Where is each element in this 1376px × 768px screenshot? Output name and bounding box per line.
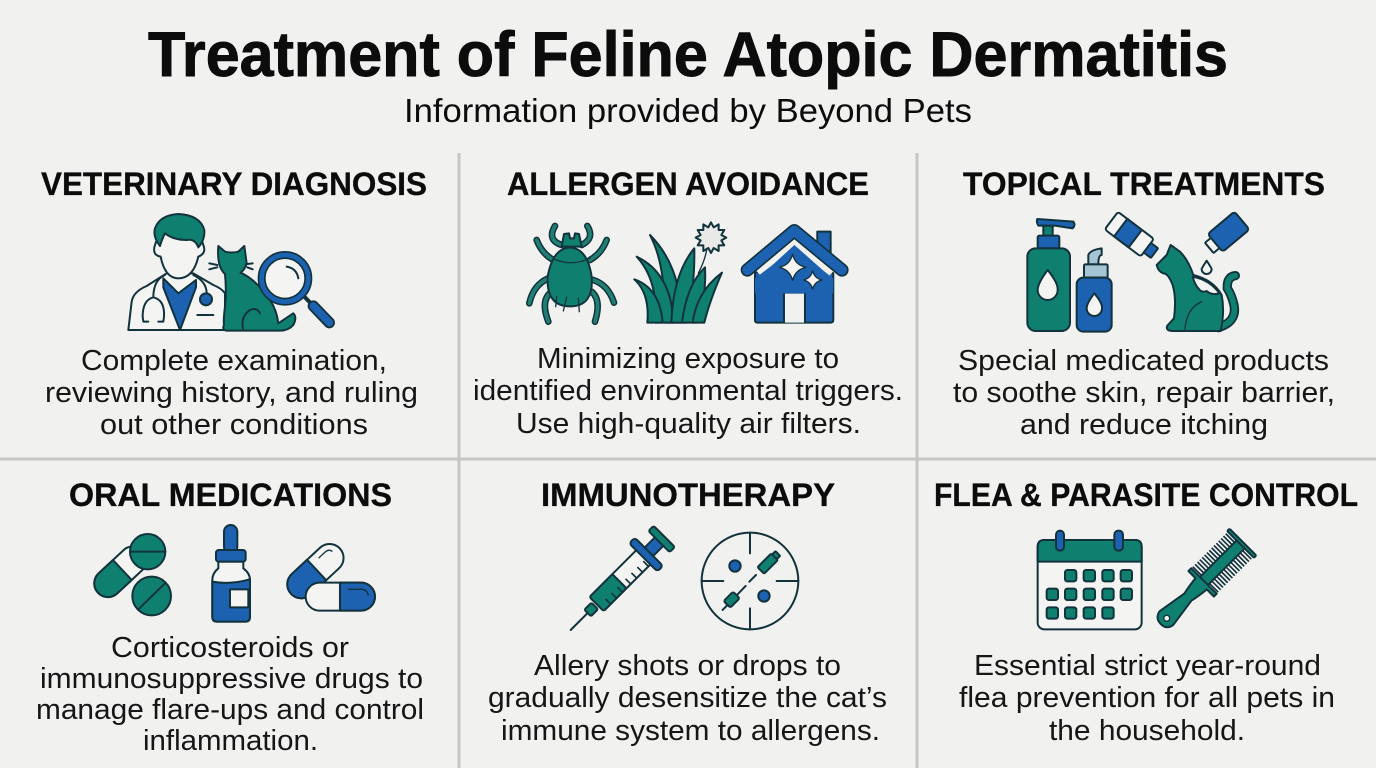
icon: grass and dandelion [634, 222, 726, 323]
body text [473, 343, 903, 440]
body text: out other conditions [100, 409, 368, 441]
panel: flea and parasite control [934, 477, 1358, 747]
body text: Special medicated products [958, 345, 1329, 377]
heading: immunotherapy: IMMUNOTHERAPY [541, 477, 835, 513]
icon: pump bottles [1027, 219, 1112, 332]
body text: flea prevention for all pets in [959, 682, 1335, 714]
panel: immunotherapy [488, 477, 887, 747]
body text: Corticosteroids or [111, 632, 350, 664]
icon: dropper bottle [212, 525, 250, 622]
body text: Essential strict year-round [974, 650, 1321, 682]
body text: gradually desensitize the cat’s [488, 682, 887, 714]
body text: immune system to allergens. [501, 715, 880, 747]
panel: veterinary diagnosis [41, 166, 427, 441]
body text [959, 650, 1335, 747]
heading: flea and parasite control: FLEA & PARASITE CONTROL [934, 477, 1358, 513]
heading: topical treatments: TOPICAL TREATMENTS [963, 166, 1325, 202]
icon: vet, cat and magnifying glass [128, 214, 329, 331]
icon: cat receiving drops [1105, 212, 1249, 331]
body text: Complete examination, [81, 345, 387, 377]
icon: teal capsule and tablets [89, 534, 171, 615]
body text: Allery shots or drops to [534, 650, 841, 682]
heading: allergen avoidance: ALLERGEN AVOIDANCE [507, 166, 869, 202]
heading: oral medications: ORAL MEDICATIONS [69, 477, 392, 513]
body text [36, 632, 424, 757]
panel: oral medications [36, 477, 424, 757]
panel: topical treatments [953, 166, 1335, 441]
body text: manage flare-ups and control [36, 694, 424, 726]
icon: clean house [747, 231, 842, 323]
body text: and reduce itching [1020, 409, 1268, 441]
icon: mite [529, 226, 614, 322]
heading: veterinary diagnosis: VETERINARY DIAGNOSIS [41, 166, 427, 202]
body text [45, 345, 418, 441]
title: Treatment of Feline Atopic Dermatitis [148, 20, 1228, 90]
body text: Minimizing exposure to [537, 343, 839, 375]
body text: Use high-quality air filters. [516, 408, 861, 440]
body text: the household. [1049, 715, 1245, 747]
body text: reviewing history, and ruling [45, 377, 418, 409]
icon: calendar [1038, 531, 1142, 629]
subtitle: Information provided by Beyond Pets [404, 92, 972, 129]
body text: immunosuppressive drugs to [40, 663, 423, 695]
body text: inflammation. [143, 725, 318, 757]
body text: to soothe skin, repair barrier, [953, 377, 1335, 409]
icon: syringe [557, 522, 678, 644]
body text [488, 650, 887, 747]
panel: allergen avoidance [473, 166, 903, 440]
body text [953, 345, 1335, 441]
icon: flea comb [1147, 529, 1256, 638]
icon: allergen dish [702, 533, 798, 629]
body text: identified environmental triggers. [473, 375, 903, 407]
icon: blue capsules [282, 538, 375, 611]
